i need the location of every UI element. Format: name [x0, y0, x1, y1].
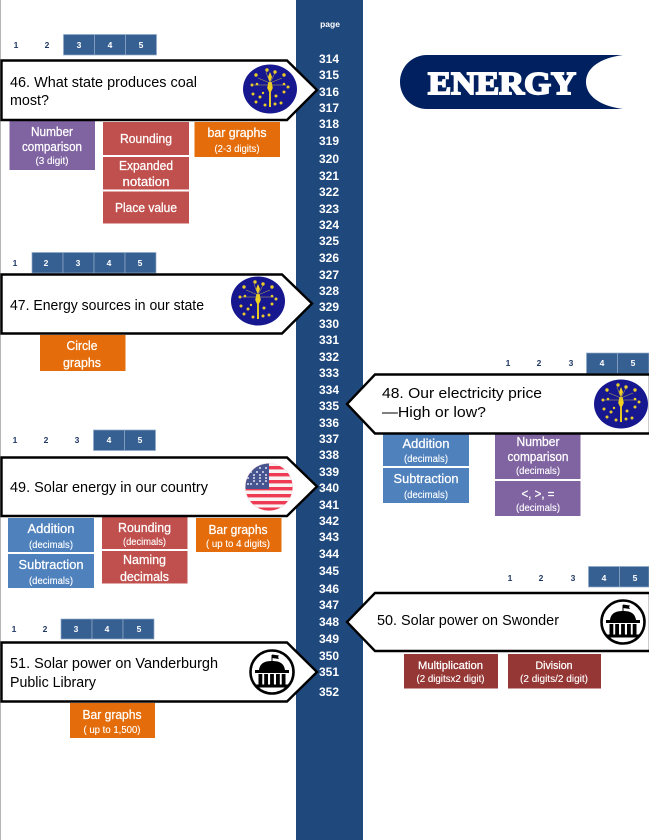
callout: lesson 47: 47. Energy sources in our state [10, 297, 204, 314]
callout: lesson 50: 50. Solar power on Swonder [377, 612, 559, 629]
tile: expanded notation [103, 157, 189, 190]
lesson 49 difficulty scale: 4 [107, 435, 112, 445]
lesson 49 difficulty scale: 5 [138, 435, 143, 445]
callout: lesson 48: 48. Our electricity price [382, 385, 542, 402]
page number column: 333 [319, 366, 339, 380]
page number column: 324 [319, 218, 339, 232]
lesson 48 difficulty scale: 1 [506, 358, 511, 368]
page number column: 348 [319, 615, 339, 629]
tile: subtraction decimals: Subtraction [18, 558, 84, 572]
tile: division [508, 654, 601, 688]
page number column: page [320, 19, 340, 29]
page number column: 321 [319, 169, 339, 183]
page number column: 318 [319, 117, 339, 131]
lesson 48 difficulty scale: 3 [569, 358, 574, 368]
tile: comparison symbols decimals: (decimals) [516, 503, 560, 514]
tile: bar graphs up to 4 digits: Bar graphs [208, 523, 268, 537]
tile: addition decimals: Addition [402, 437, 450, 451]
tile: number comparison [10, 118, 95, 170]
lesson 49 skill tiles [8, 516, 282, 588]
tile: addition decimals: (decimals) [404, 454, 448, 465]
lesson 46 difficulty scale [14, 34, 156, 55]
callout: lesson 46: 46. What state produces coal [10, 74, 197, 91]
lesson 47 difficulty scale: 3 [76, 258, 81, 268]
tile: number comparison decimals: (decimals) [516, 466, 560, 477]
tile: naming decimals [102, 551, 188, 584]
callout: lesson 51 [2, 642, 317, 702]
tile: number comparison: Number [31, 125, 73, 139]
lesson 50 difficulty scale: 1 [508, 573, 513, 583]
page number column: 337 [319, 432, 339, 446]
lesson 51 difficulty scale: 5 [137, 624, 142, 634]
tile: expanded notation: Expanded [119, 159, 173, 173]
tile: circle graphs: Circle [66, 339, 98, 353]
icon: US flag [245, 463, 293, 511]
page number column: 328 [319, 284, 339, 298]
tile: division: Division [536, 660, 572, 672]
page number column: 326 [319, 251, 339, 265]
tile: multiplication: Multiplication [418, 660, 483, 672]
page number column: 323 [319, 202, 339, 216]
lesson 46 difficulty scale: 4 [108, 40, 113, 50]
tile: rounding [103, 122, 189, 155]
page number column: 317 [319, 101, 339, 115]
tile: bar graphs up to 1,500 [70, 703, 155, 738]
tile: rounding decimals [102, 516, 188, 549]
tile: circle graphs: graphs [63, 356, 101, 370]
callout: lesson 47 [2, 274, 312, 334]
lesson 51 difficulty scale [12, 619, 154, 639]
lesson 50 difficulty scale: 4 [602, 573, 607, 583]
page number column: 319 [319, 134, 339, 148]
tile: subtraction decimals: (decimals) [404, 490, 448, 501]
lesson 46 difficulty scale: 1 [14, 40, 19, 50]
tile: number comparison decimals: Number [516, 435, 560, 449]
page number column: 325 [319, 234, 339, 248]
tile: addition decimals: Addition [28, 522, 75, 536]
page number column: 349 [319, 632, 339, 646]
page number column: 342 [319, 514, 339, 528]
tile: bar graphs up to 4 digits: ( up to 4 digits) [206, 539, 270, 550]
lesson 47 difficulty scale: 1 [13, 258, 18, 268]
page number column: 352 [319, 685, 339, 699]
page number column: 351 [319, 665, 339, 679]
lesson 47 difficulty scale [13, 252, 156, 273]
page number column: 327 [319, 268, 339, 282]
tile: rounding decimals: (decimals) [123, 537, 166, 548]
tile: number comparison decimals: comparison [508, 450, 569, 464]
lesson 50 difficulty scale [508, 566, 649, 587]
lesson 48 difficulty scale: 2 [537, 358, 542, 368]
tile: number comparison: comparison [22, 140, 82, 154]
page number column: 336 [319, 416, 339, 430]
callout: lesson 46: most? [10, 92, 49, 109]
callout: lesson 46 [2, 60, 317, 120]
title banner: ENERGY [400, 55, 623, 109]
lesson 50 difficulty scale: 5 [633, 573, 638, 583]
page number column: 338 [319, 448, 339, 462]
lesson 49 difficulty scale [13, 430, 156, 450]
callout: lesson 48: —High or low? [382, 404, 486, 421]
lesson 50 difficulty scale: 2 [539, 573, 544, 583]
lesson 50 difficulty scale: 3 [571, 573, 576, 583]
page number column: 335 [319, 399, 339, 413]
page number column: 334 [319, 383, 339, 397]
tile: division: (2 digits/2 digit) [520, 674, 588, 685]
tile: comparison symbols decimals: <, >, = [522, 487, 554, 501]
tile: naming decimals: decimals [120, 570, 169, 584]
lesson 49 difficulty scale: 3 [75, 435, 80, 445]
tile: subtraction decimals [8, 554, 94, 588]
page number column: 322 [319, 185, 339, 199]
tile: bar graphs: (2-3 digits) [214, 144, 260, 155]
tile: bar graphs: bar graphs [208, 126, 266, 140]
lesson 50 skill tiles [404, 654, 601, 688]
callout: lesson 50 [347, 593, 649, 651]
page number column: 340 [319, 481, 339, 495]
lesson 48 skill tiles [383, 432, 580, 516]
icon: library building [250, 650, 294, 694]
page number column: 329 [319, 300, 339, 314]
page number column: 344 [319, 547, 339, 561]
lesson 49 difficulty scale: 2 [44, 435, 49, 445]
page number column: 341 [319, 498, 339, 512]
icon: library building [602, 600, 644, 644]
tile: circle graphs [40, 335, 126, 371]
tile: rounding: Rounding [120, 132, 172, 146]
lesson 46 difficulty scale: 5 [139, 40, 144, 50]
lesson 46 difficulty scale: 3 [77, 40, 82, 50]
tile: place value: Place value [115, 201, 177, 215]
page number column: 346 [319, 582, 339, 596]
lesson 46 difficulty scale: 2 [45, 40, 50, 50]
tile: expanded notation: notation [122, 175, 170, 189]
page number column: 350 [319, 649, 339, 663]
tile: multiplication: (2 digitsx2 digit) [416, 674, 484, 685]
tile: rounding decimals: Rounding [118, 521, 171, 535]
page number column: 345 [319, 564, 339, 578]
tile: addition decimals: (decimals) [29, 540, 73, 551]
icon: Indiana flag [594, 380, 648, 428]
lesson 46 skill tiles [10, 118, 280, 224]
callout: lesson 49 [2, 458, 317, 516]
tile: comparison symbols decimals [495, 481, 580, 516]
page number column: 320 [319, 152, 339, 166]
lesson 48 difficulty scale: 5 [631, 358, 636, 368]
page number column: 316 [319, 85, 339, 99]
lesson 47 difficulty scale: 2 [44, 258, 49, 268]
title banner: ENERGY: ENERGY [428, 65, 576, 101]
page number column: 330 [319, 317, 339, 331]
page number column: 347 [319, 598, 339, 612]
tile: bar graphs up to 4 digits [196, 518, 282, 552]
tile: naming decimals: Naming [123, 553, 166, 567]
lesson 51 difficulty scale: 3 [74, 624, 79, 634]
page number column: 339 [319, 465, 339, 479]
tile: bar graphs [194, 122, 280, 157]
lesson 51 difficulty scale: 1 [12, 624, 17, 634]
lesson 51 difficulty scale: 4 [105, 624, 110, 634]
lesson 47 difficulty scale: 5 [138, 258, 143, 268]
callout: lesson 51: Public Library [10, 674, 96, 691]
tile: subtraction decimals [383, 468, 469, 503]
tile: bar graphs up to 1,500: Bar graphs [82, 708, 142, 722]
page number column: 343 [319, 530, 339, 544]
tile: addition decimals [383, 432, 469, 466]
lesson 48 difficulty scale [506, 353, 649, 374]
tile: number comparison: (3 digit) [36, 156, 68, 167]
tile: subtraction decimals: (decimals) [29, 576, 73, 587]
page number column: 331 [319, 333, 339, 347]
tile: subtraction decimals: Subtraction [394, 472, 459, 486]
tile: place value [103, 192, 189, 224]
page number column [296, 0, 363, 840]
page number column: 314 [319, 52, 339, 66]
lesson 48 difficulty scale: 4 [600, 358, 605, 368]
lesson 47 difficulty scale: 4 [107, 258, 112, 268]
tile: number comparison decimals [495, 432, 580, 479]
tile: addition decimals [8, 518, 94, 552]
callout: lesson 51: 51. Solar power on Vanderburgh [10, 655, 218, 672]
lesson 51 difficulty scale: 2 [43, 624, 48, 634]
lesson 49 difficulty scale: 1 [13, 435, 18, 445]
tile: bar graphs up to 1,500: ( up to 1,500) [84, 725, 140, 736]
page number column: 315 [319, 68, 339, 82]
icon: Indiana flag [231, 276, 285, 326]
icon: Indiana flag [243, 64, 297, 114]
callout: lesson 49: 49. Solar energy in our country [10, 479, 208, 496]
callout: lesson 48 [347, 374, 649, 434]
tile: multiplication [404, 654, 498, 688]
page number column: 332 [319, 350, 339, 364]
